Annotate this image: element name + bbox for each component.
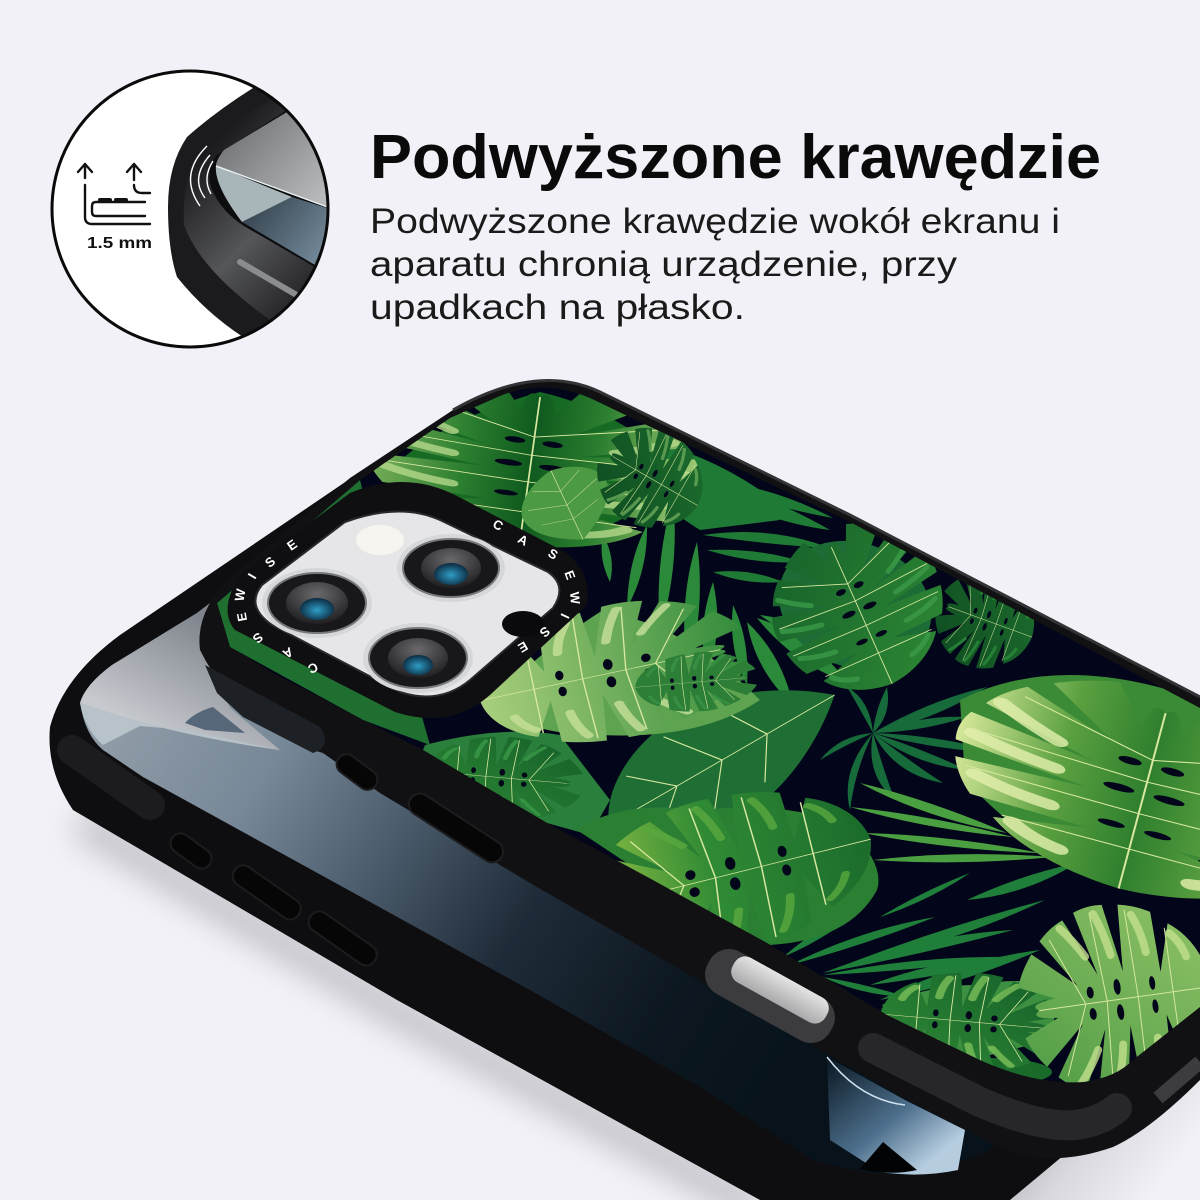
description text [370,202,1060,327]
flash [356,525,404,555]
inset circle: raised edge detail [52,60,340,347]
floor shadow right [980,1060,1200,1200]
sliver of foliage beside camera [217,480,430,745]
description text: Podwyższone krawędzie wokół ekranu i [370,202,1060,241]
camera island [228,482,588,718]
brand text: C [305,659,320,677]
screen corner wallpaper [827,1057,965,1175]
rim highlight [240,262,300,297]
hanging palm blades [602,524,838,690]
impact arcs [191,146,213,206]
wallpaper black triangle [860,1142,917,1173]
lower phone volume buttons [167,829,381,969]
brand text: S [262,553,278,571]
brand text: I [245,571,259,581]
rim top edge [453,380,1200,697]
brand text: S [545,545,561,563]
lens top right [397,534,505,602]
circle outline [52,71,328,347]
screen reflection gray [80,580,280,750]
hub palm [820,687,1000,810]
brand text: A [515,531,531,549]
side button small [333,750,381,794]
lower palm blades [783,863,1077,1000]
case bump lower left [205,665,325,753]
leaf print [190,359,1200,1109]
brand text: C [490,516,506,534]
glass dark [242,197,330,265]
brand text: S [250,629,266,647]
bright long blades [850,783,1053,862]
description text: aparatu chronią urządzenie, przy [370,245,958,284]
screen reflection pale band [80,703,280,750]
side button long [405,789,507,867]
camera ring [228,482,588,718]
brand text: A [280,644,296,662]
reflection line [216,166,330,208]
brand text: W [232,587,249,602]
upper phone case [199,380,1200,1158]
lower phone case [49,472,1070,1200]
brand text: S [537,623,553,641]
upper palm blades [666,449,833,583]
wallpaper arc [827,1057,905,1105]
lower phone glossy bump [72,750,150,805]
brand text: E [284,536,300,554]
lens left [262,568,372,638]
case corner close-up [168,88,326,336]
lens bottom [363,623,473,693]
brand text: E [515,638,531,656]
icon label: 1.5 mm [87,235,152,252]
brand text: I [557,611,573,621]
port metal [727,952,833,1028]
monstera leaves [352,359,1200,1109]
port bevel [697,941,843,1051]
brand text: E [561,568,579,582]
microphone cutout [502,611,544,637]
glass upper [216,110,330,208]
raised edge icon [78,164,150,224]
brand text: E [234,611,250,623]
right-side port strip [1158,1062,1200,1098]
brand text [232,516,583,677]
brand text: W [567,591,583,605]
lower phone screen [80,520,1000,1175]
description text: upadkach na płasko. [370,288,745,327]
glass lower [216,166,292,222]
case glossy rim at corner [873,1048,1117,1125]
screen dark notch [185,707,245,733]
phone shadow on floor [80,822,760,1200]
camera plate [255,511,559,696]
heading: Podwyższone krawędzie [370,123,1101,192]
